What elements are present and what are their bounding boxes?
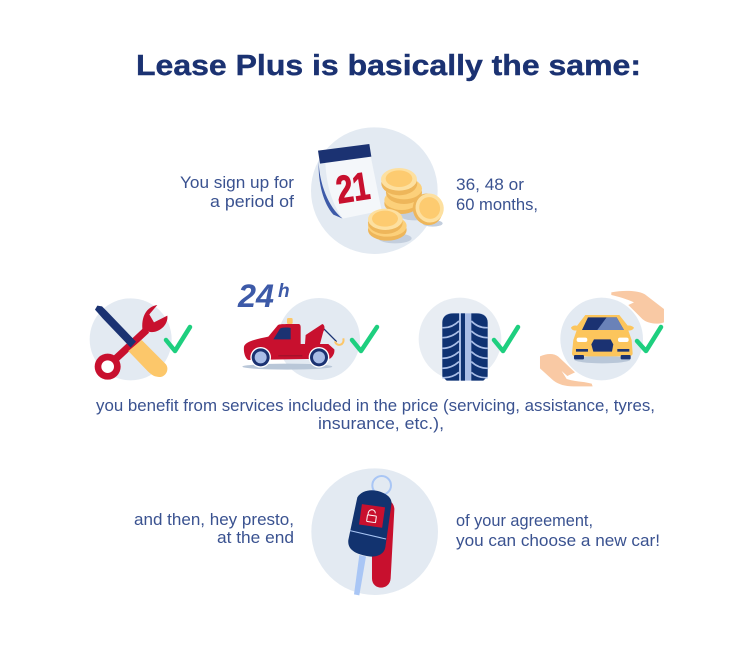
truck xyxy=(242,318,344,370)
icon: car in hands xyxy=(540,291,664,386)
text: sign up right xyxy=(456,175,538,214)
text: sign up left: You sign up for xyxy=(180,173,294,192)
text: sign up right: 60 months, xyxy=(456,195,538,214)
text: end right: of your agreement, xyxy=(456,511,593,530)
icon: tools xyxy=(90,298,172,380)
text: end right: you can choose a new car! xyxy=(456,531,660,550)
text: services xyxy=(96,396,655,433)
icon: 24h tow truck xyxy=(237,278,360,380)
title: Lease Plus is basically the same: xyxy=(136,50,641,82)
hand top xyxy=(611,291,664,324)
label: 24h: h xyxy=(278,281,290,302)
calendar: 21 xyxy=(333,165,373,212)
icon: check 1 xyxy=(166,327,190,351)
text: services: insurance, etc.), xyxy=(318,414,444,433)
text: services: you benefit from services included in the price (servicing, assistance, tyres, xyxy=(96,396,655,415)
icon: tyre xyxy=(419,298,501,381)
hand bottom xyxy=(540,354,593,386)
lock xyxy=(367,510,376,523)
icon: check 3 xyxy=(494,327,518,351)
wrench xyxy=(98,305,167,376)
car xyxy=(571,315,634,363)
icon: car key xyxy=(311,468,438,595)
red tag xyxy=(372,497,394,588)
text: sign up left xyxy=(180,173,294,211)
icon: check 2 xyxy=(352,327,377,351)
coin stacks xyxy=(368,168,449,243)
text: sign up left: a period of xyxy=(210,192,294,211)
key blade xyxy=(354,555,366,595)
text: end left: at the end xyxy=(217,528,294,547)
icon: calendar and coins xyxy=(311,127,449,254)
text: end left: and then, hey presto, xyxy=(134,510,294,529)
screwdriver xyxy=(95,306,167,377)
label: 24h xyxy=(237,278,290,314)
text: end right xyxy=(456,511,660,550)
text: sign up right: 36, 48 or xyxy=(456,175,524,194)
key ring xyxy=(372,476,391,495)
icon: check 4 xyxy=(637,327,661,351)
label: 24h: 24 xyxy=(237,278,274,314)
fob xyxy=(348,490,392,557)
text: end left xyxy=(134,510,294,547)
